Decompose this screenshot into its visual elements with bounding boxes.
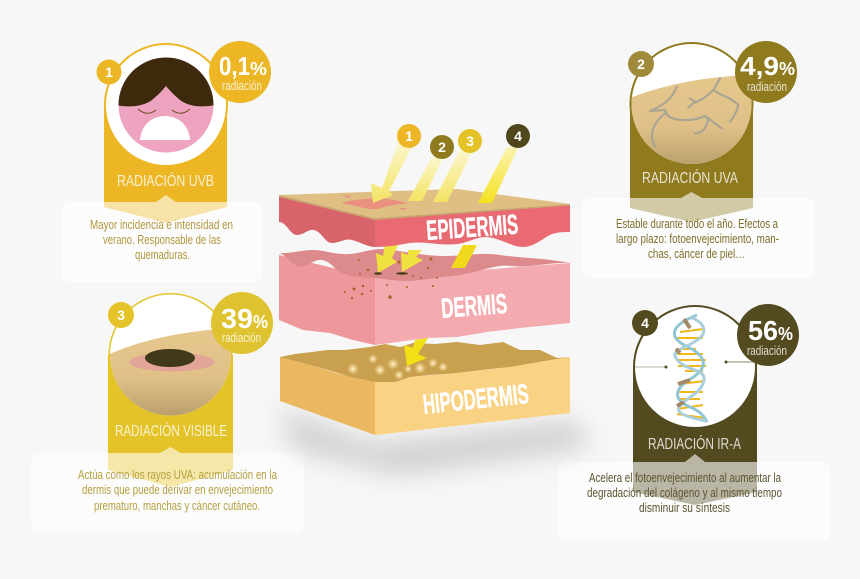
ray marker 4: 4 <box>514 128 522 144</box>
icon: sunburnt face <box>116 55 216 153</box>
arrow 2 <box>408 157 443 201</box>
layer shadow <box>278 408 590 475</box>
white circle UVB <box>106 45 226 165</box>
card UVB <box>61 195 262 282</box>
percent badge visible: 39 <box>221 303 253 334</box>
number badge 3: 3 <box>117 307 125 323</box>
arrow 1 <box>371 143 412 203</box>
description IR-A: degradación del colágeno y al mismo tiempo <box>587 485 782 500</box>
layer: hipodermis <box>280 342 570 435</box>
description visible: prematuro, manchas y cáncer cutáneo. <box>94 498 260 513</box>
description UVB: quemaduras. <box>135 247 190 262</box>
panel: radiación UVA <box>616 41 797 260</box>
description UVA: chas, cáncer de piel… <box>648 246 745 261</box>
arrow 4 <box>478 147 518 203</box>
percent badge UVA: radiación <box>747 79 787 94</box>
burn spots <box>374 272 408 275</box>
ribbon badge UVB <box>104 105 227 223</box>
ray marker 3 <box>458 129 482 153</box>
label: hipodermis: HIPODERMIS <box>421 378 530 420</box>
description UVA: largo plazo: fotoenvejecimiento, man- <box>616 231 779 246</box>
number badge 1: 1 <box>105 64 113 80</box>
ribbon title UVA: RADIACIÓN UVA <box>642 168 738 187</box>
panel: radiación visible <box>78 292 277 512</box>
number badge 1 <box>96 60 122 84</box>
arrow 3 <box>433 150 472 202</box>
percent badge UVB: % <box>250 59 267 79</box>
number badge 2 <box>628 51 654 77</box>
panel: radiación UVB <box>90 41 271 262</box>
badge ring IR-A <box>633 305 757 429</box>
description IR-A: disminuir su síntesis <box>639 500 730 515</box>
percent badge visible: % <box>253 312 268 332</box>
ribbon title visible: RADIACIÓN VISIBLE <box>115 421 227 440</box>
percent badge IR-A: % <box>778 324 793 344</box>
number badge 2: 2 <box>637 56 645 72</box>
icon: DNA helix <box>674 315 707 422</box>
ray marker 1: 1 <box>405 128 413 144</box>
ray marker 2 <box>430 135 454 159</box>
ribbon badge IR-A <box>633 367 757 505</box>
label: epidermis: EPIDERMIS <box>425 209 519 246</box>
description IR-A <box>587 470 782 515</box>
description UVA: Estable durante todo el año. Efectos a <box>616 216 779 231</box>
skin layers diagram <box>278 124 590 475</box>
card IR-A <box>558 454 830 541</box>
badge ring UVB <box>104 43 228 167</box>
percent badge UVB: radiación <box>222 78 262 93</box>
number badge 3 <box>108 302 134 328</box>
panel: radiación IR-A <box>558 304 830 541</box>
pointer line right <box>724 360 765 364</box>
description visible: dermis que puede derivar en envejecimiento <box>82 482 273 497</box>
percent badge IR-A <box>737 304 799 366</box>
number badge 4: 4 <box>641 315 649 331</box>
badge ring visible <box>108 293 232 417</box>
ray marker 1 <box>397 124 421 148</box>
card UVA <box>582 192 815 278</box>
icon: skin lesion <box>110 294 231 416</box>
arrow into dermis 1 <box>376 245 398 273</box>
description UVB: verano. Responsable de las <box>103 232 221 247</box>
sub-surface glow spots <box>347 354 448 380</box>
description UVB: Mayor incidencia e intensidad en <box>90 217 233 232</box>
ray marker 4 <box>506 124 530 148</box>
description visible <box>78 467 278 513</box>
label: dermis: DERMIS <box>440 288 508 324</box>
layer: dermis <box>279 249 570 345</box>
pigment dots <box>344 258 438 299</box>
arrow into hipodermis <box>404 338 428 366</box>
description IR-A: Acelera el fotoenvejecimiento al aumentar la <box>589 470 782 485</box>
ray marker 3: 3 <box>466 133 474 149</box>
percent badge UVA <box>735 41 797 103</box>
card visible <box>31 447 304 532</box>
percent badge UVB <box>209 41 271 103</box>
ray marker 2: 2 <box>438 139 446 155</box>
pointer line left <box>635 366 668 368</box>
percent badge visible <box>211 292 273 354</box>
arrow into dermis 2 <box>401 250 423 272</box>
ribbon title UVB: RADIACIÓN UVB <box>117 171 214 190</box>
ribbon badge visible <box>108 355 233 487</box>
percent badge IR-A: radiación <box>747 343 787 358</box>
percent badge IR-A: 56 <box>748 315 778 346</box>
number badge 4 <box>632 310 658 336</box>
percent badge visible: radiación <box>222 330 261 345</box>
description visible: Actúa como los rayos UVA: acumulación en la <box>78 467 278 482</box>
badge ring UVA <box>630 42 754 166</box>
percent badge UVA: 4,9 <box>740 51 779 81</box>
layer: epidermis <box>279 189 570 247</box>
percent badge UVA: % <box>779 59 795 79</box>
percent badge UVB: 0,1 <box>219 51 250 81</box>
ribbon title IR-A: RADIACIÓN IR-A <box>648 434 741 453</box>
icon: cracked skin <box>632 44 752 164</box>
description UVB <box>90 217 233 262</box>
description UVA <box>616 216 779 261</box>
ribbon badge UVA <box>630 104 753 222</box>
burn patch <box>341 195 408 210</box>
white circle IR-A <box>635 307 755 427</box>
arrow into dermis 3 <box>451 245 477 268</box>
